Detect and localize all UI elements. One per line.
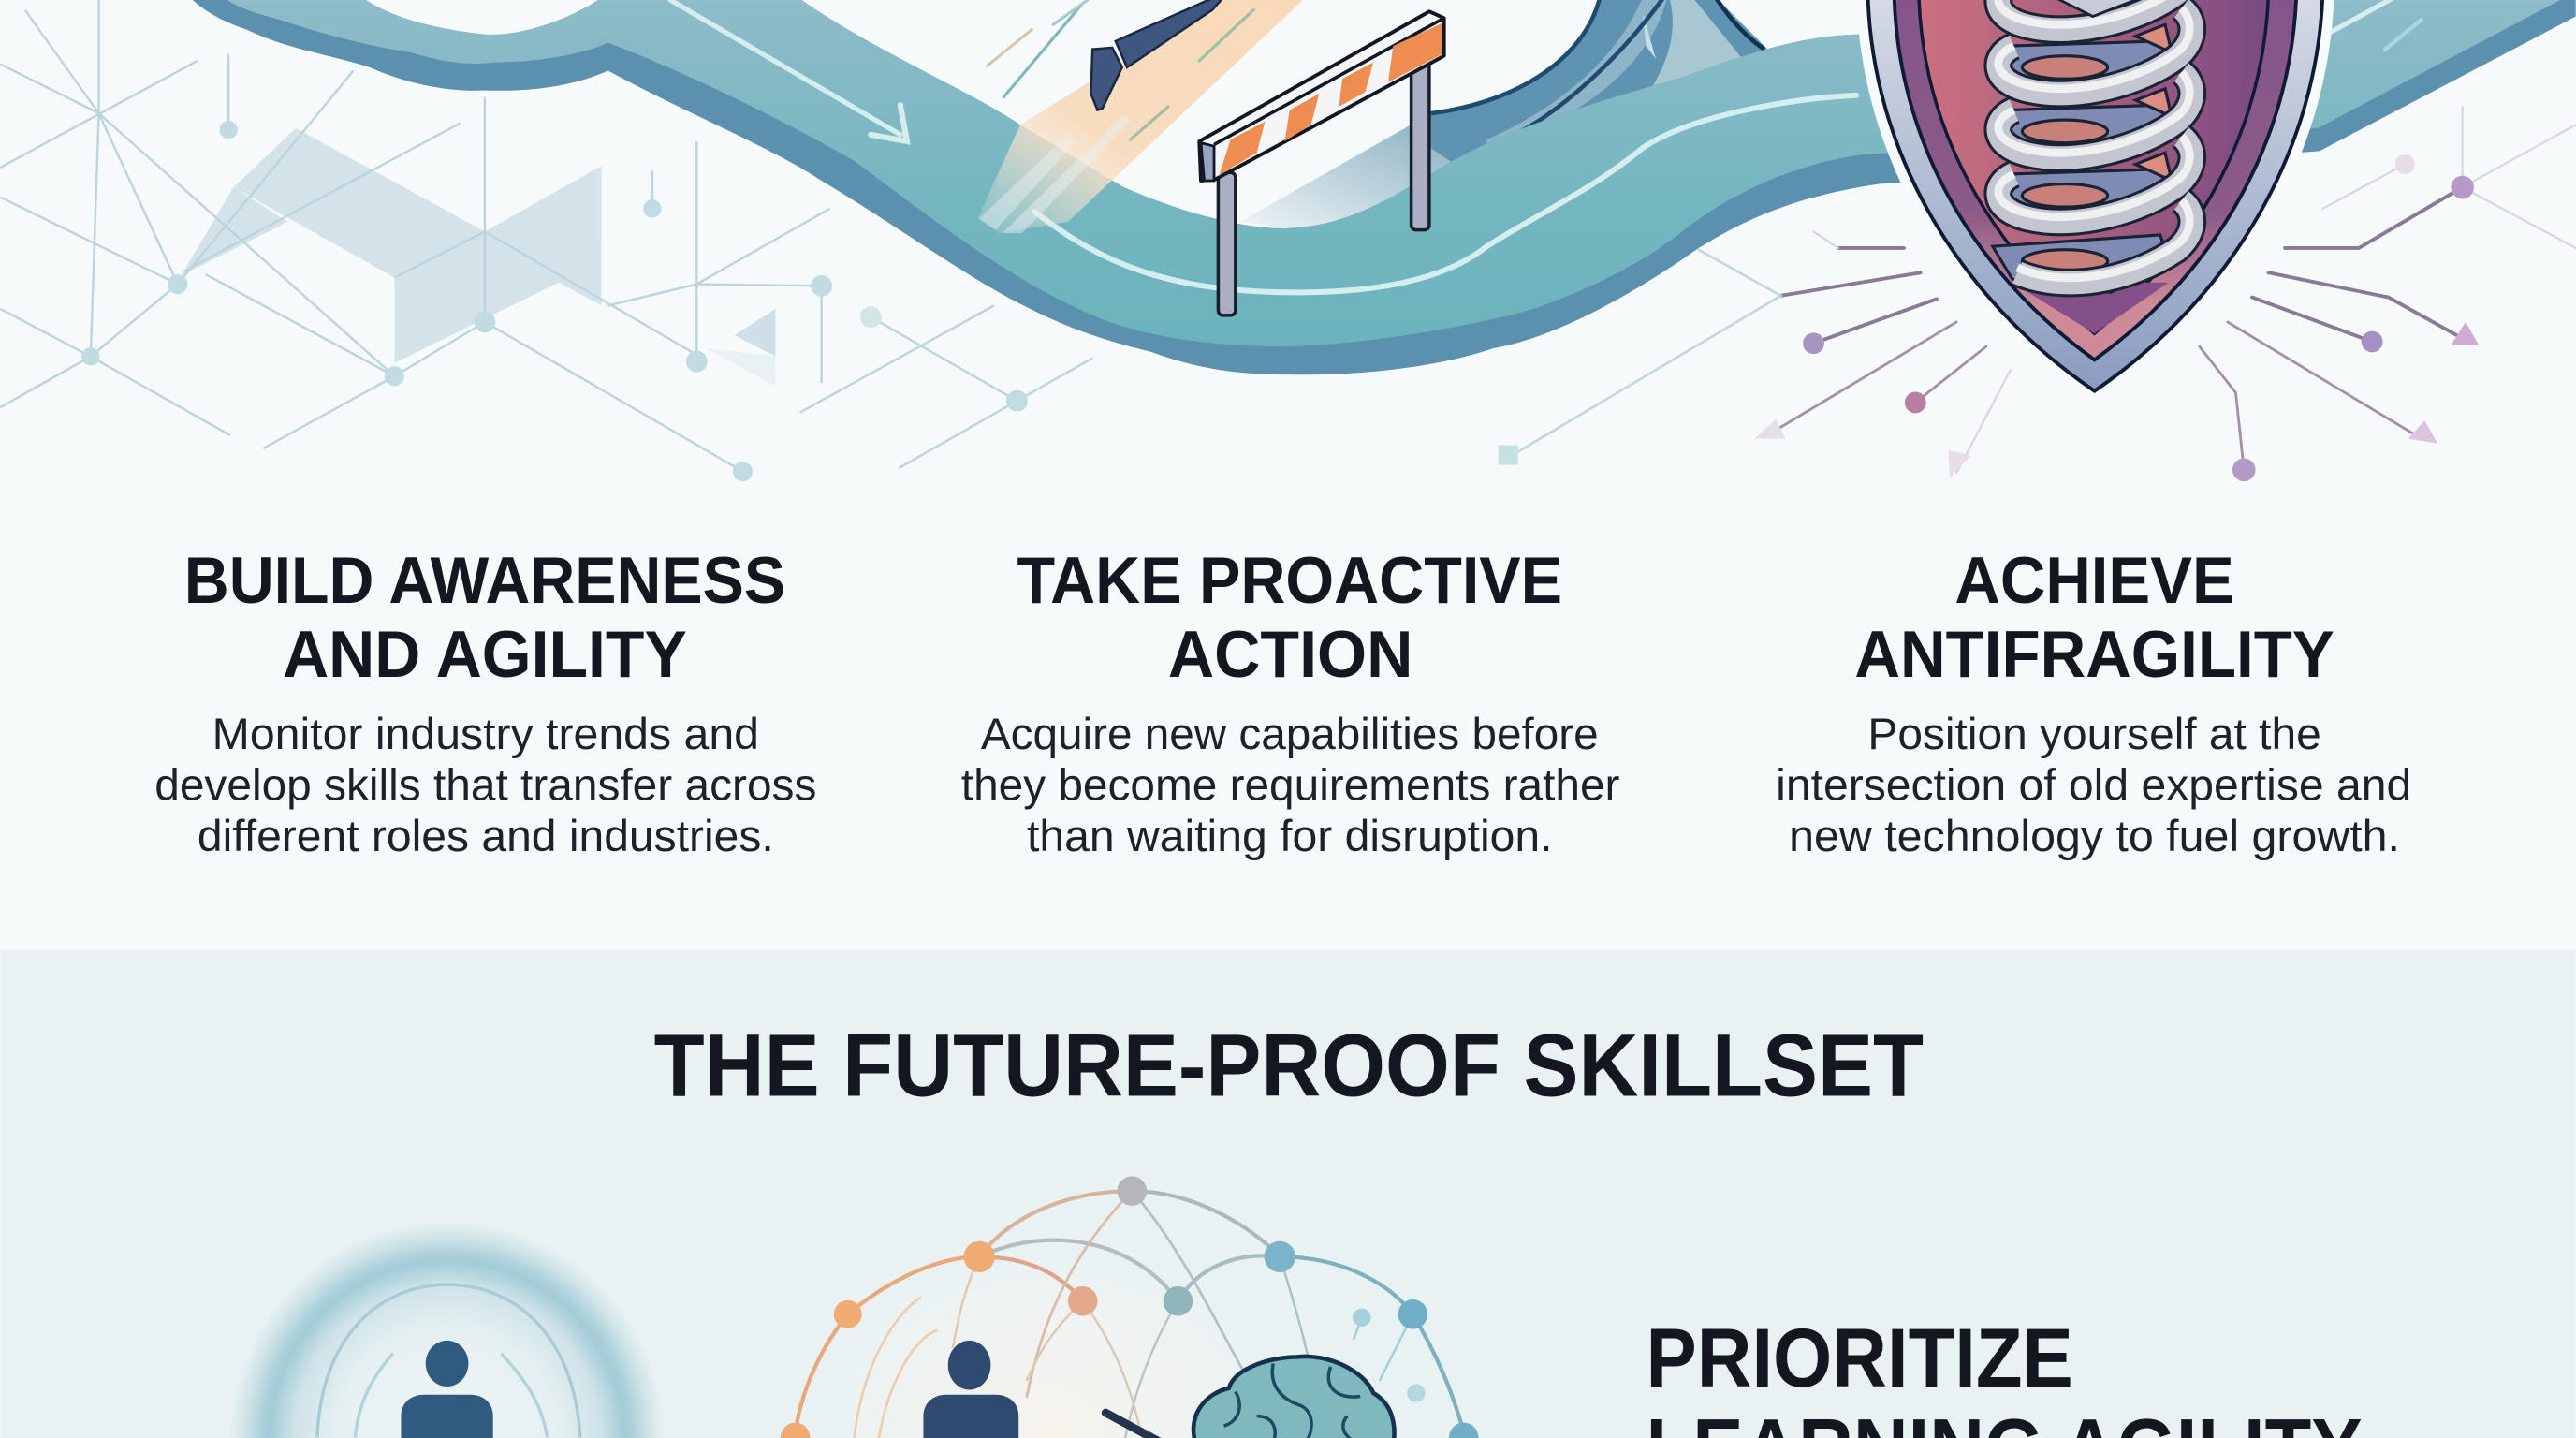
network arcs bbox=[796, 1191, 1464, 1437]
body text: intersection of old expertise and bbox=[1776, 761, 2411, 811]
body text: new technology to fuel growth. bbox=[1789, 812, 2400, 861]
skillset section background bbox=[0, 949, 2576, 1438]
runner leg bbox=[1090, 0, 1224, 110]
body text: Acquire new capabilities before bbox=[981, 710, 1599, 759]
heading: AND AGILITY bbox=[283, 617, 687, 691]
speed lines bbox=[988, 0, 1253, 139]
background network pattern bbox=[0, 0, 1092, 481]
hurdle bbox=[1199, 11, 1444, 315]
skill heading: prioritize learning agility bbox=[1647, 1311, 2363, 1438]
section title: THE FUTURE-PROOF SKILLSET bbox=[654, 1016, 1924, 1115]
speed beam bbox=[977, 0, 1303, 233]
column: achieve antifragility bbox=[1776, 543, 2411, 861]
body text bbox=[961, 710, 1619, 861]
road lane line with arrow bbox=[670, 0, 2422, 292]
body text: than waiting for disruption. bbox=[1027, 812, 1553, 861]
icon: person in focus rings bbox=[228, 1221, 666, 1438]
road blue edge bbox=[189, 0, 2576, 374]
body text: they become requirements rather bbox=[961, 761, 1619, 811]
body text: Position yourself at the bbox=[1867, 710, 2321, 759]
top section background bbox=[0, 0, 2576, 949]
coil rings bbox=[1998, 0, 2192, 283]
road teal surface bbox=[222, 0, 2576, 346]
heading: TAKE PROACTIVE bbox=[1017, 543, 1562, 617]
ray end points bbox=[1499, 154, 2479, 481]
heading: ACTION bbox=[1168, 617, 1412, 691]
speed beam glints bbox=[979, 115, 1131, 233]
shield halo bbox=[1856, 0, 2334, 403]
wave obstacle bbox=[1240, 0, 1767, 230]
coil backing blocks bbox=[1993, 24, 2172, 292]
resilience shield bbox=[1867, 0, 2322, 391]
heading bbox=[184, 543, 785, 691]
column: build awareness and agility bbox=[154, 543, 816, 861]
skill heading: prioritize learning agility: PRIORITIZE bbox=[1647, 1311, 2073, 1404]
hurdle top bar bbox=[1199, 11, 1444, 181]
heading: ANTIFRAGILITY bbox=[1854, 617, 2334, 691]
body text bbox=[1776, 710, 2411, 861]
body text: Monitor industry trends and bbox=[212, 710, 759, 759]
body text: different roles and industries. bbox=[198, 812, 774, 861]
heading: BUILD AWARENESS bbox=[184, 543, 785, 617]
hurdle posts bbox=[1218, 50, 1429, 315]
column: take proactive action bbox=[961, 543, 1619, 861]
heading bbox=[1017, 543, 1562, 691]
heading bbox=[1854, 543, 2334, 691]
network nodes bbox=[781, 1176, 1479, 1438]
shield energy rays bbox=[1510, 107, 2576, 473]
body text: develop skills that transfer across bbox=[154, 761, 816, 811]
person silhouette bbox=[923, 1341, 1018, 1438]
connector handle bbox=[1105, 1413, 1170, 1438]
heading: ACHIEVE bbox=[1954, 543, 2234, 617]
spring coil bbox=[1993, 0, 2192, 292]
icon: learning network with person and brain bbox=[781, 1176, 1479, 1438]
body text bbox=[154, 710, 816, 861]
brain bbox=[1193, 1357, 1394, 1438]
hurdle stripes bbox=[1219, 23, 1442, 176]
shield top gem bbox=[2054, 0, 2144, 17]
